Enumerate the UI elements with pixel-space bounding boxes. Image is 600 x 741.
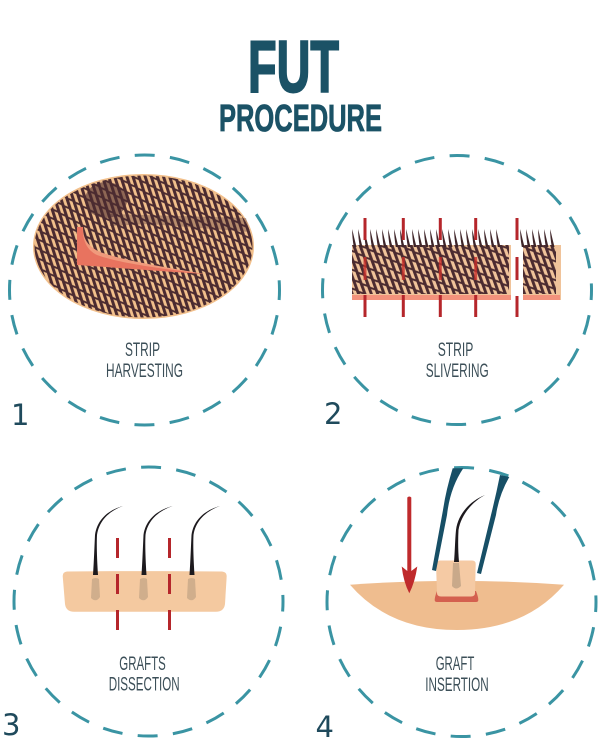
label: graft insertion — [425, 654, 489, 696]
number 1: 1 — [11, 398, 29, 432]
title line: PROCEDURE: PROCEDURE — [219, 98, 382, 140]
label: strip harvesting — [106, 340, 183, 382]
label: strip harvesting: HARVESTING — [106, 361, 183, 382]
arrow: insertion direction — [402, 496, 417, 593]
label: graft insertion: INSERTION — [425, 675, 489, 696]
dashed ring 1 — [10, 155, 280, 425]
cut lines — [118, 538, 170, 630]
label: grafts dissection — [109, 654, 180, 696]
number 3: 3 — [2, 708, 20, 741]
illustration: skin and inserted graft — [350, 495, 564, 630]
illustration: skin sliver with three hairs — [63, 506, 227, 612]
label: grafts dissection: DISSECTION — [109, 675, 180, 696]
dashed ring 2 — [322, 156, 592, 424]
number 2: 2 — [324, 397, 342, 431]
panel 2: strip slivering — [322, 156, 592, 431]
label: strip harvesting: STRIP — [125, 340, 160, 361]
label: strip slivering — [426, 340, 489, 382]
label: strip slivering: SLIVERING — [426, 361, 489, 382]
label: strip slivering: STRIP — [438, 340, 473, 361]
illustration: sliced strip with hair — [352, 229, 561, 300]
title — [219, 27, 382, 140]
panel 3: grafts dissection — [2, 467, 283, 741]
illustration: scalp with harvested strip — [33, 174, 254, 319]
icon: forceps — [432, 468, 509, 574]
label: graft insertion: GRAFT — [436, 654, 475, 675]
panel 4: graft insertion — [316, 468, 596, 741]
panel 1: strip harvesting — [10, 155, 280, 432]
label: grafts dissection: GRAFTS — [119, 654, 166, 675]
cut lines — [365, 218, 517, 317]
dashed ring 3 — [14, 467, 283, 736]
title line: FUT: FUT — [248, 27, 339, 108]
dashed ring 4 — [327, 468, 596, 736]
